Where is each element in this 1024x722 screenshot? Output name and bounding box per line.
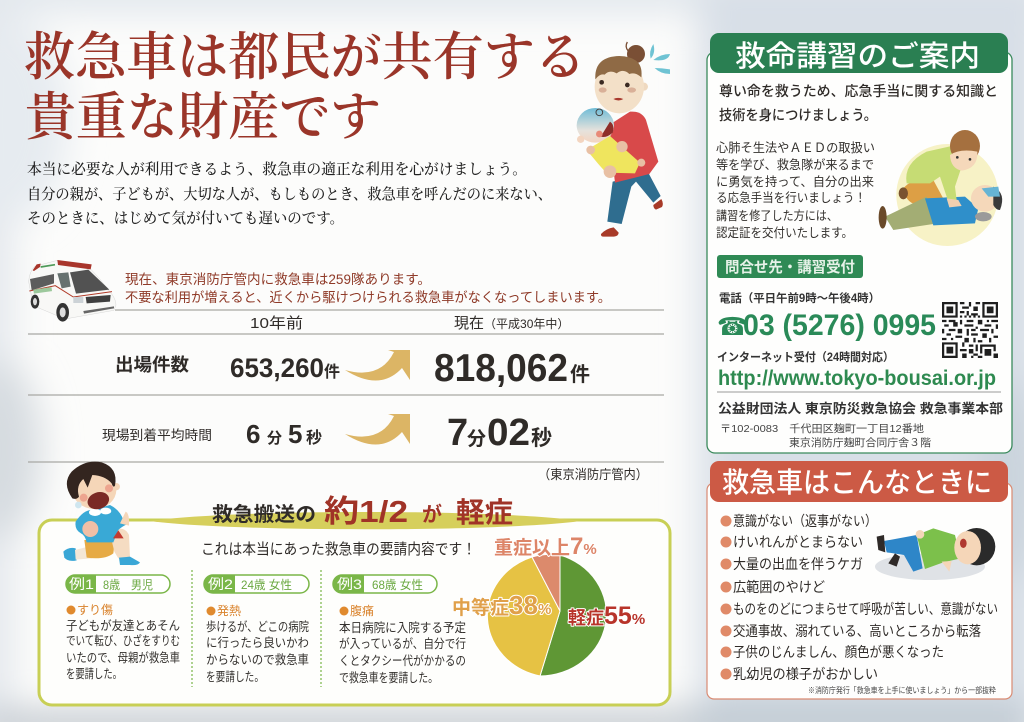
symptom list: 意識がない（返事がない） [733, 513, 877, 529]
heading banner: が [422, 502, 442, 526]
intro text: 自分の親が、子どもが、大切な人が、もしものとき、救急車を呼んだのに来ない、 [27, 185, 552, 203]
arrival time 10 years ago: 分 [267, 430, 282, 447]
example 1: を要請した。 [66, 667, 122, 681]
row label: arrival time: 現場到着平均時間 [102, 427, 212, 443]
arrival time now: 02 [487, 412, 530, 454]
pie label: moderate: 中等症38% [452, 590, 551, 620]
column header: 10 years ago: 10年前 [250, 315, 303, 332]
intro text [27, 160, 552, 227]
ambulance note [125, 272, 611, 305]
course description: 認定証を交付いたします。 [716, 226, 853, 240]
example 2: を要請した。 [206, 670, 264, 684]
title [24, 30, 586, 147]
panel: mild cases [39, 494, 670, 705]
lead text: 尊い命を救うため、応急手当に関する知識と [719, 83, 998, 99]
phone: 電話（平日午前9時～午後4時） [719, 291, 880, 305]
comparison table [28, 310, 664, 482]
dispatches 10 years ago: 653,260 [230, 353, 324, 383]
example 2: からないので救急車 [206, 652, 309, 667]
heading banner [150, 494, 581, 529]
dispatches now: 818,062 [434, 347, 568, 390]
internet: http://www.tokyo-bousai.or.jp [718, 367, 996, 390]
ambulance note: 現在、東京消防庁管内に救急車は259隊あります。 [125, 272, 431, 287]
title: 救急車は都民が共有する [24, 30, 586, 87]
intro text: 本当に必要な人が利用できるよう、救急車の適正な利用を心がけましょう。 [27, 160, 527, 178]
column header: current: 現在（平成30年中） [454, 315, 569, 332]
phone: 03 (5276) 0995 [743, 309, 936, 342]
course description: に勇気を持って、自分の出来 [716, 174, 874, 189]
arrival time now: 7 [447, 412, 468, 454]
example 3: 68歳 女性 [372, 578, 423, 592]
internet: インターネット受付（24時間対応） [717, 350, 894, 364]
dispatches 10 years ago: 件 [324, 363, 340, 381]
panel: when to call ambulance [707, 461, 1012, 699]
arrival time now: 分 [467, 428, 486, 450]
header [710, 33, 1008, 73]
arrival time 10 years ago: 秒 [306, 429, 322, 447]
pie label: severe: 重症以上7% [494, 533, 597, 560]
arrival time 10 years ago: 6 [246, 419, 260, 449]
example 3: くとタクシー代がかかるの [339, 653, 466, 668]
organisation: 公益財団法人 東京防災救急協会 救急事業本部 [718, 401, 1003, 416]
pie label: mild: 軽症55% [568, 602, 645, 630]
phone [717, 291, 936, 342]
arrival time 10 years ago: 5 [288, 419, 302, 449]
example 1: いたので、母親が救急車 [66, 650, 180, 665]
arrow [345, 350, 410, 381]
panel: first aid course [707, 33, 1012, 453]
course description [716, 141, 875, 240]
example 2: 歩けるが、どこの病院 [206, 619, 309, 634]
example 2: 発熱 [217, 604, 241, 618]
organisation: 〒102-0083 千代田区麹町一丁目12番地 [720, 422, 925, 435]
example 1: でいて転び、ひざをすりむ [66, 633, 180, 648]
example 3 [333, 575, 466, 685]
phone: ☎ [717, 312, 748, 341]
heading banner: 約1/2 [324, 494, 408, 529]
example 2: 24歳 女性 [241, 578, 292, 592]
icon: child lying down [875, 528, 995, 580]
callout: ambulance count [29, 260, 611, 322]
contact label [717, 255, 863, 278]
icon: mother carrying baby [577, 42, 670, 237]
symptom list: 子供のじんましん、顔色が悪くなった [733, 644, 944, 660]
example 2: 例2 [208, 576, 233, 592]
source footnote: ※消防庁発行「救急車を上手に使いましょう」から一部抜粋 [808, 685, 996, 695]
example 1: すり傷 [77, 602, 113, 617]
lead text: 技術を身につけましょう。 [719, 107, 877, 123]
symptom list: けいれんがとまらない [733, 534, 863, 550]
row label: dispatches: 出場件数 [115, 355, 189, 375]
header: 救急車はこんなときに [722, 467, 992, 498]
pie chart [452, 533, 645, 676]
lead text [719, 83, 998, 123]
example 2 [204, 575, 309, 684]
symptom list: 広範囲のやけど [733, 579, 825, 595]
internet [717, 350, 996, 390]
organisation [718, 401, 1003, 449]
subheading: これは本当にあった救急車の要請内容です！ [201, 541, 476, 558]
arrival time now [447, 412, 552, 454]
icon: CPR [879, 130, 1002, 246]
organisation: 東京消防庁麹町合同庁舎３階 [789, 436, 932, 449]
example 1: 例1 [69, 576, 94, 592]
example 1 [66, 575, 180, 681]
arrival time now: 秒 [531, 427, 552, 450]
symptom list: 交通事故、溺れている、高いところから転落 [733, 623, 981, 639]
example 2: に行ったら良いかわ [206, 635, 309, 650]
title: 貴重な財産です [25, 90, 381, 147]
example 3: が入っているが、自分で行 [339, 636, 466, 651]
icon: ambulance [29, 260, 116, 322]
example 1: 8歳 男児 [103, 578, 153, 592]
example 3: で救急車を要請した。 [339, 670, 438, 685]
course description: 心肺そ生法やＡＥＤの取扱い [716, 141, 875, 155]
QR code [941, 301, 999, 359]
example 3: 例3 [337, 576, 362, 592]
arrow [345, 414, 410, 445]
header: 救命講習のご案内 [735, 40, 980, 73]
symptom list: 大量の出血を伴うケガ [733, 556, 863, 572]
course description: 講習を修了した方には、 [716, 208, 838, 223]
dispatches now: 件 [570, 363, 590, 386]
example 1: 子どもが友達とあそん [66, 618, 180, 633]
symptom list: 乳幼児の様子がおかしい [733, 666, 878, 682]
icon: crying child [63, 462, 140, 565]
course description: る応急手当を行いましょう！ [716, 190, 866, 205]
arrival time 10 years ago [246, 419, 322, 449]
heading banner: 救急搬送の [212, 503, 316, 526]
ambulance note: 不要な利用が増えると、近くから駆けつけられる救急車がなくなってしまいます。 [125, 290, 611, 305]
example 3: 腹痛 [350, 604, 374, 618]
heading banner: 軽症 [456, 497, 513, 528]
course description: 等を学び、救急隊が来るまで [716, 157, 874, 172]
source note: （東京消防庁管内） [538, 467, 648, 482]
example 3: 本日病院に入院する予定 [339, 621, 466, 635]
symptom list [720, 513, 998, 682]
intro text: そのときに、はじめて気が付いても遅いのです。 [27, 210, 344, 227]
contact label: 問合せ先・講習受付 [725, 258, 855, 276]
